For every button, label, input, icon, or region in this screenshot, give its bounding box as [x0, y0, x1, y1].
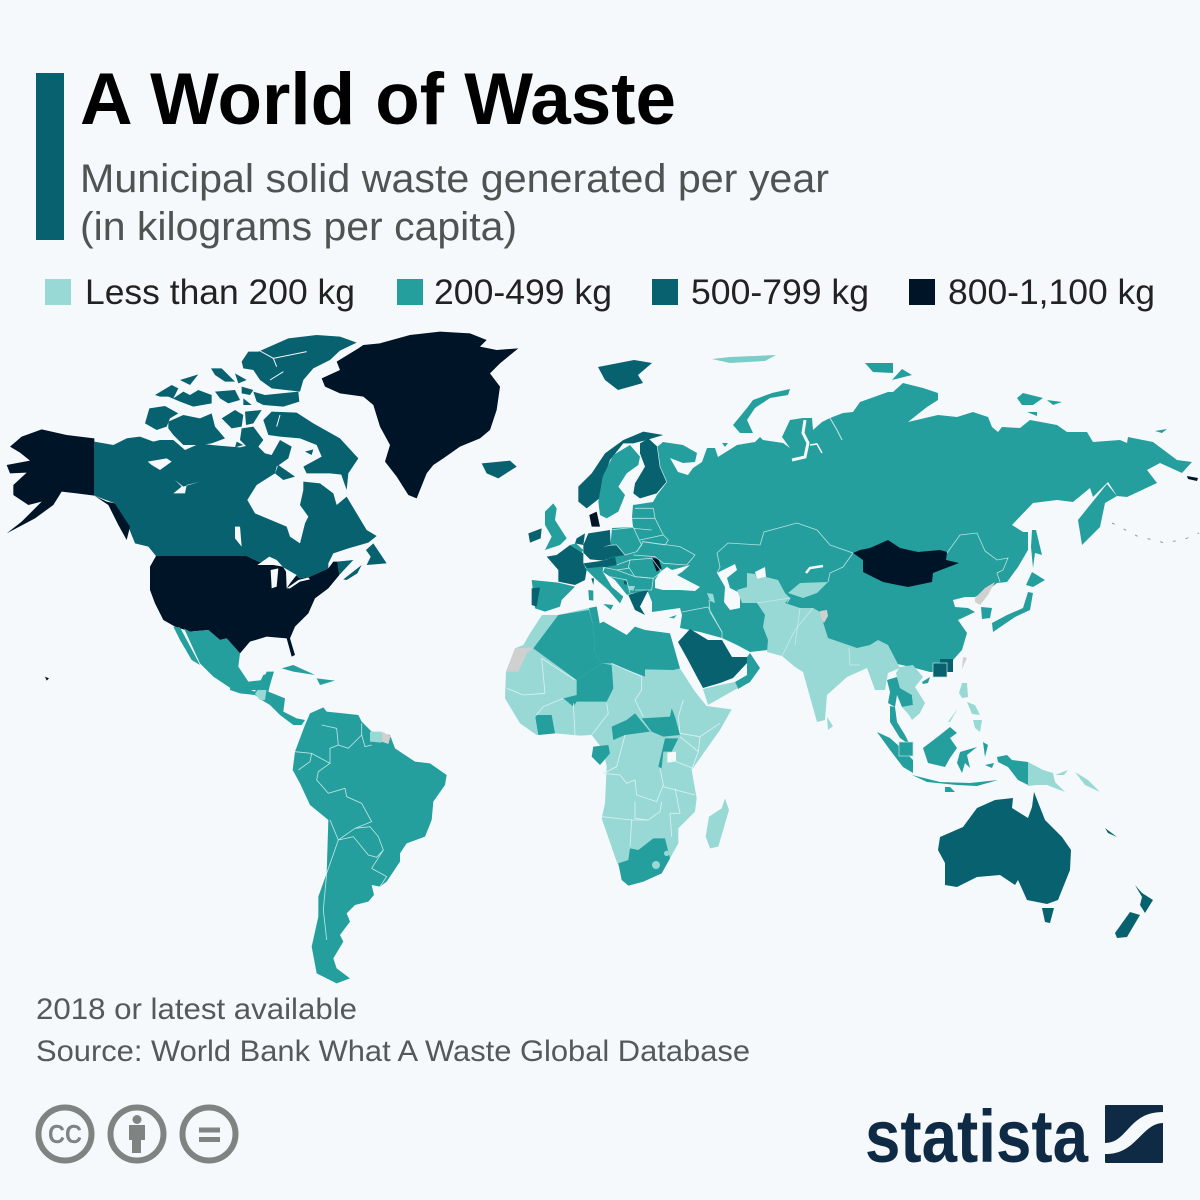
accent bar: [36, 73, 64, 240]
Western Sahara: [506, 647, 533, 672]
Uganda: [658, 738, 678, 768]
New Zealand: [1135, 885, 1153, 913]
Ivory Coast: [535, 715, 555, 735]
Greece: [628, 590, 648, 615]
Singapore marker: [899, 742, 913, 756]
statista logo icon: [1105, 1105, 1163, 1163]
Sri Lanka: [827, 717, 833, 730]
Ireland: [528, 528, 542, 543]
Corsica: [591, 578, 594, 585]
French Guiana: [382, 732, 391, 744]
Finland: [633, 438, 667, 498]
icon: creative commons: [38, 1108, 92, 1160]
world map: [7, 332, 1199, 983]
Portugal: [532, 587, 540, 607]
Benelux: [575, 533, 585, 545]
Thailand: [887, 677, 913, 707]
Vietnam Laos Cambodia: [896, 665, 925, 720]
Madagascar: [706, 798, 729, 848]
Macao marker: [940, 659, 953, 672]
Eurasian borders: [682, 523, 1008, 665]
statista wordmark: statista: [865, 1095, 1089, 1178]
Italy: [585, 567, 623, 603]
North Macedonia: [628, 586, 635, 591]
Kosovo: [624, 581, 627, 585]
Tasmania: [1042, 908, 1054, 923]
Niger: [563, 663, 613, 707]
South Africa: [618, 838, 670, 886]
title: A World of Waste: [80, 59, 676, 140]
Moldova: [652, 558, 662, 572]
North America and Greenland: [7, 332, 518, 690]
subtitle: Municipal solid waste generated per year: [80, 157, 829, 201]
African borders: [507, 658, 720, 847]
Yemen: [703, 682, 738, 705]
Africa: [230, 607, 732, 983]
South Korea: [981, 607, 992, 619]
Mexico: [184, 628, 274, 690]
footnote: Source: World Bank What A Waste Global Database: [36, 1035, 750, 1068]
Armenia: [707, 593, 715, 603]
Greenland: [322, 332, 518, 498]
Philippines: [948, 683, 982, 732]
Denmark: [589, 512, 600, 527]
Indonesia: [877, 727, 1028, 792]
icon: no derivatives: [182, 1108, 236, 1160]
Libya: [593, 622, 645, 677]
United Kingdom: [545, 503, 567, 550]
Contiguous United States: [150, 556, 339, 657]
Kashmir: [820, 610, 828, 623]
legend: 800-1,100 kg: [948, 273, 1155, 312]
Kyrgyzstan: [788, 582, 828, 598]
Alaska: [7, 429, 130, 540]
Aral Sea: [755, 567, 766, 579]
Suriname: [370, 732, 382, 743]
South Sudan: [642, 708, 680, 737]
Central African Republic: [612, 713, 650, 740]
Iceland: [482, 461, 517, 478]
icon: attribution: [110, 1108, 164, 1160]
legend: [45, 273, 1155, 312]
Algeria: [533, 610, 602, 680]
Tunisia: [589, 607, 600, 627]
Australia: [938, 792, 1071, 904]
legend: 200-499 kg: [434, 273, 612, 312]
legend: 500-799 kg: [691, 273, 869, 312]
Gabon: [592, 745, 610, 765]
South American borders: [295, 723, 387, 940]
North Korea: [975, 582, 995, 605]
Canada: [94, 335, 387, 580]
Hispaniola: [317, 678, 335, 685]
Guatemala: [255, 686, 267, 700]
Germany: [583, 530, 615, 561]
legend: Less than 200 kg: [85, 273, 355, 312]
Eswatini: [664, 851, 669, 856]
Hawaii: [45, 677, 49, 681]
Central America: [230, 672, 305, 725]
Norway: [578, 432, 663, 508]
footnote: [36, 993, 750, 1068]
Belgium: [570, 543, 583, 553]
Eurasia landmass: [598, 355, 1199, 730]
Cuba: [282, 665, 315, 675]
subtitle: [80, 157, 829, 249]
South America: [293, 707, 447, 983]
icon: creative commons: CC: [48, 1119, 82, 1149]
footnote: 2018 or latest available: [36, 993, 357, 1026]
Arabia and Southeast Asia: [678, 629, 1153, 938]
Austria and Switzerland: [583, 557, 617, 568]
subtitle: (in kilograms per capita): [80, 205, 517, 249]
Oman and UAE: [735, 653, 760, 689]
Central Asia and South Asia: [737, 573, 900, 722]
Lake Victoria: [667, 752, 676, 763]
borders: [603, 447, 695, 593]
Spain: [532, 580, 575, 612]
Great Lakes: [257, 557, 310, 588]
Taiwan: [962, 657, 967, 669]
Hainan: [922, 677, 930, 684]
Cyprus: [669, 615, 677, 618]
Papua New Guinea: [1028, 762, 1065, 792]
Mongolia: [853, 540, 959, 587]
Europe: [528, 432, 695, 618]
Svalbard: [598, 360, 652, 390]
Saudi Arabia: [678, 629, 747, 688]
New Caledonia: [1105, 828, 1117, 837]
Sweden: [598, 445, 640, 518]
Czechia: [603, 545, 625, 557]
Malay Peninsula: [890, 706, 910, 745]
Lesotho: [652, 861, 660, 869]
France: [547, 545, 587, 585]
Hong Kong marker: [933, 663, 947, 677]
Egypt: [645, 630, 680, 670]
